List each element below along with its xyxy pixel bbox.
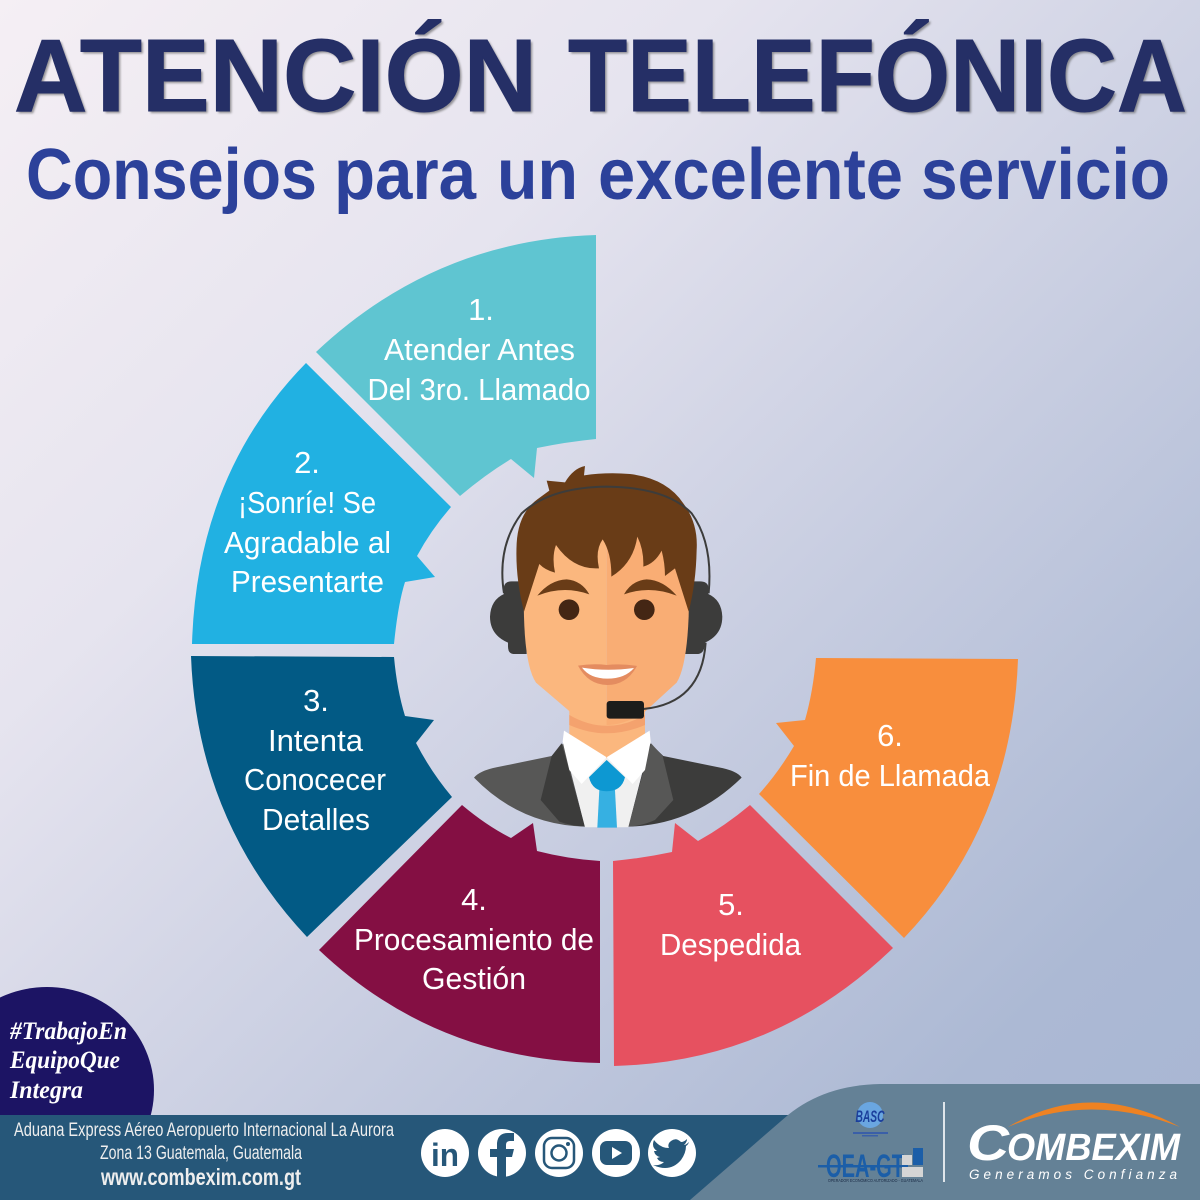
logo panel: [690, 1084, 1200, 1200]
segment 3: conocer detalles: Detalles: [262, 802, 370, 837]
icon: call-center agent with headset: [474, 466, 742, 828]
segment 6: fin de llamada: 6.: [877, 718, 903, 753]
subtitle: Consejos: [26, 135, 317, 215]
segment 5: despedida: 5.: [718, 887, 744, 922]
subtitle: excelente: [598, 135, 903, 215]
segment 1: atender antes: 1.: [468, 292, 494, 327]
logo: BASC: BASC: [856, 1107, 885, 1126]
segment 4: procesamiento: 4.: [461, 882, 487, 917]
subtitle: un: [497, 135, 578, 215]
segment 4: procesamiento: Procesamiento de: [354, 922, 594, 957]
headband: [502, 487, 709, 593]
segment 2: sonríe: ¡Sonríe! Se: [238, 485, 376, 520]
logo: Combexim: [967, 1102, 1181, 1182]
footer address: www.combexim.com.gt: [100, 1164, 301, 1190]
segment 3: conocer detalles: [191, 656, 452, 937]
segment 5: despedida: [613, 805, 893, 1066]
segment 2: sonríe: 2.: [294, 445, 320, 480]
segment 4: procesamiento: [319, 805, 600, 1063]
segment 1: atender antes: Del 3ro. Llamado: [368, 372, 590, 407]
icon: linkedin: in: [431, 1137, 459, 1173]
title: [14, 18, 1189, 135]
tie: [589, 760, 625, 828]
microphone: [607, 701, 644, 719]
logo: Combexim: OMBEXIM: [1007, 1127, 1181, 1169]
segment 2: sonríe: Presentarte: [231, 564, 384, 599]
segment 4: procesamiento: Gestión: [422, 961, 526, 996]
segment 6: fin de llamada: [759, 658, 1018, 938]
footer bar: [0, 1115, 800, 1200]
microphone arm: [643, 643, 706, 709]
ear cups: [490, 581, 722, 654]
segment 3: conocer detalles: Intenta: [268, 723, 364, 758]
subtitle: servicio: [921, 135, 1170, 215]
certification logos: [818, 1102, 923, 1184]
subtitle: para: [334, 135, 477, 215]
hashtag badge: Integra: [9, 1077, 83, 1104]
hair: [516, 466, 697, 612]
divider: [943, 1102, 945, 1182]
neck: [569, 703, 645, 758]
footer address: [14, 1120, 394, 1190]
social icons: [421, 1129, 696, 1177]
logo: Combexim: Generamos Confianza: [969, 1167, 1177, 1182]
eyebrows: [537, 579, 589, 596]
segment 5: despedida: Despedida: [660, 927, 802, 962]
eyes: [559, 599, 579, 620]
icon: twitter: [648, 1129, 696, 1177]
logo: Combexim: C: [967, 1115, 1010, 1171]
shirt: [563, 742, 650, 827]
segment 1: atender antes: [316, 235, 596, 496]
segment 1: atender antes: Atender Antes: [384, 332, 575, 367]
mouth: [578, 664, 637, 685]
hashtag badge: [0, 987, 154, 1193]
subtitle: [26, 135, 1170, 215]
logo: OEA-GT: OPERADOR ECONÓMICO AUTORIZADO - GUATEMALA: [828, 1177, 923, 1183]
hashtag badge: EquipoQue: [9, 1047, 120, 1074]
footer address: Aduana Express Aéreo Aeropuerto Internacional La Aurora: [14, 1120, 394, 1141]
segment 2: sonríe: Agradable al: [224, 525, 391, 560]
icon: facebook: [478, 1129, 526, 1177]
collar: [563, 731, 651, 784]
title: ATENCIÓN: [14, 18, 537, 133]
footer address: Zona 13 Guatemala, Guatemala: [100, 1143, 302, 1164]
suit: [474, 743, 742, 827]
segment 3: conocer detalles: Conocecer: [244, 762, 386, 797]
segment 2: sonríe: [192, 363, 451, 644]
logo: OEA-GT: OEA-GT: [826, 1148, 904, 1184]
title: ATENCIÓN: [16, 20, 539, 135]
segment 6: fin de llamada: Fin de Llamada: [790, 758, 991, 793]
icon: instagram: [535, 1129, 583, 1177]
hashtag badge: #TrabajoEn: [9, 1018, 127, 1045]
icon: linkedin: [421, 1129, 469, 1177]
icon: youtube: [592, 1129, 640, 1177]
segment 3: conocer detalles: 3.: [303, 683, 329, 718]
face: [523, 517, 607, 725]
